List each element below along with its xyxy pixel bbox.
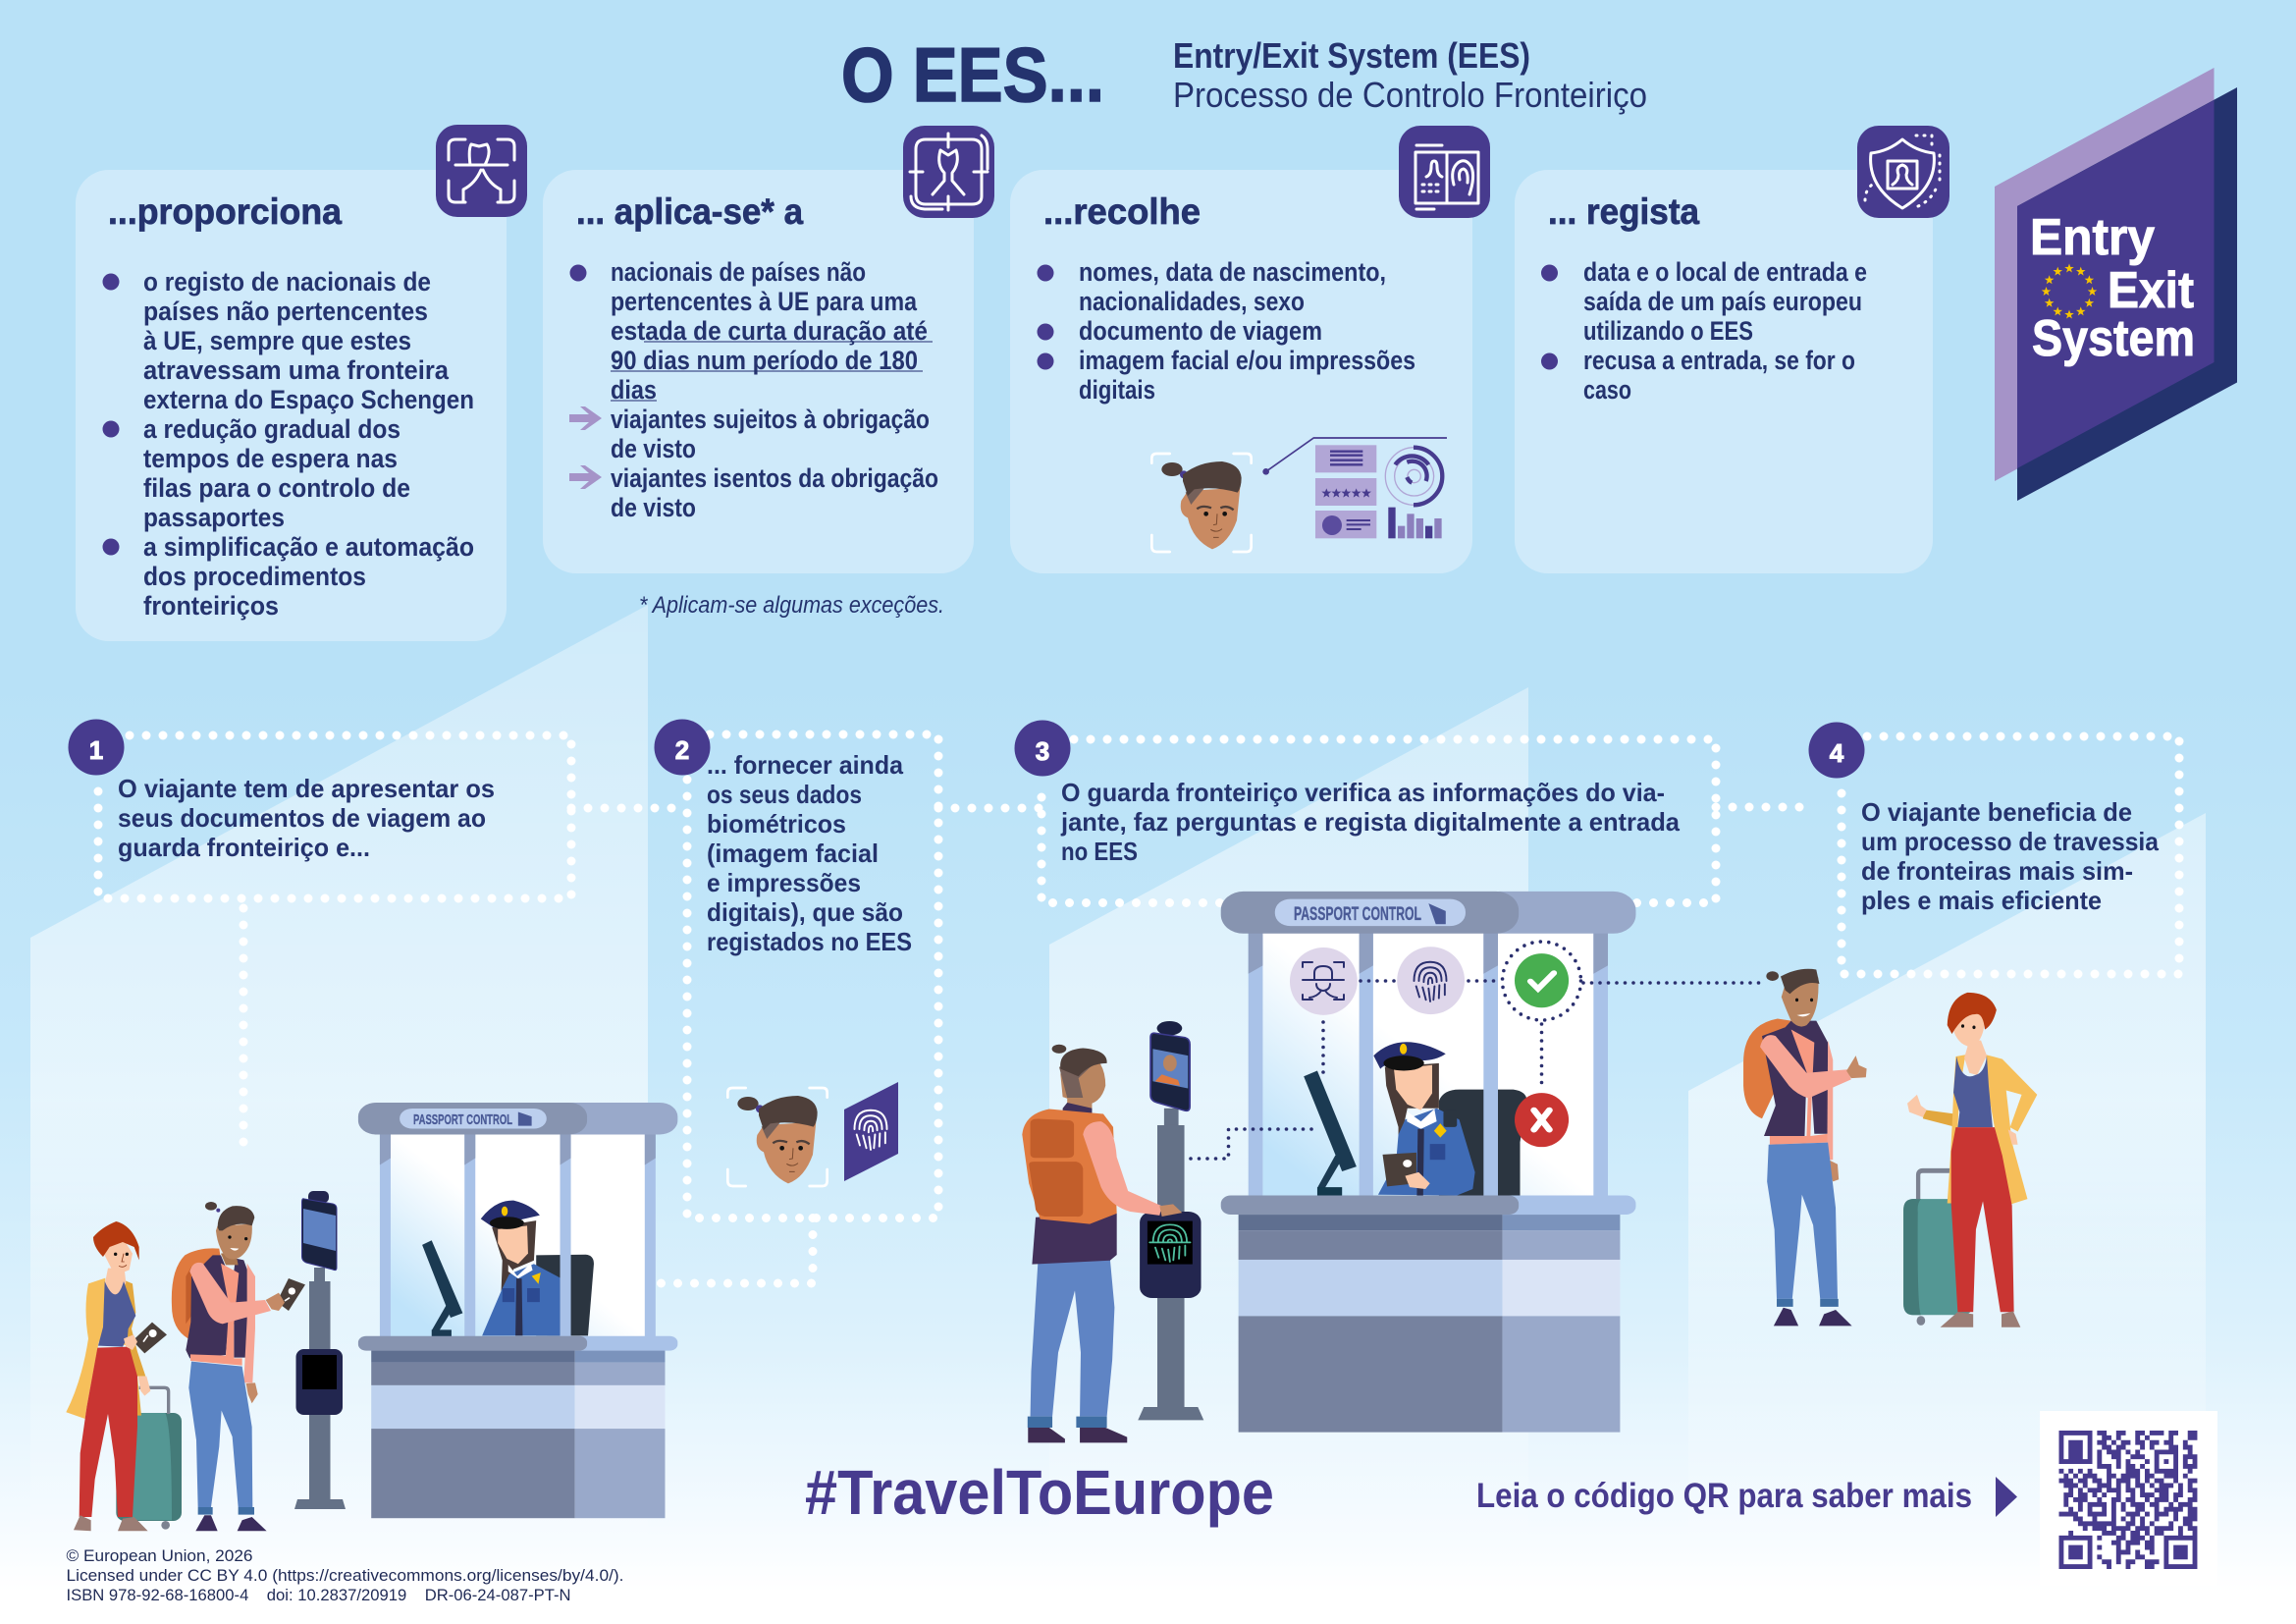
list: caso bbox=[1583, 375, 1631, 405]
list: dias bbox=[611, 375, 657, 405]
traveller: woman bbox=[66, 1221, 182, 1531]
step 1: O viajante tem de apresentar os bbox=[118, 774, 495, 803]
list bbox=[569, 257, 938, 522]
list: países não pertencentes bbox=[143, 297, 428, 326]
list: pertencentes à UE para uma bbox=[611, 287, 917, 316]
icon: face scan bbox=[436, 125, 527, 217]
list: externa do Espaço Schengen bbox=[143, 385, 474, 414]
icon: EU stars bbox=[2042, 263, 2097, 318]
list: digitais bbox=[1079, 375, 1155, 405]
list: a redução gradual dos bbox=[143, 414, 400, 444]
step 4: de fronteiras mais sim- bbox=[1861, 856, 2133, 886]
icon: fingerprint bbox=[1397, 947, 1465, 1014]
arrow: isentos bbox=[569, 465, 602, 489]
step 3: O guarda fronteiriço verifica as informações do via- bbox=[1061, 778, 1665, 807]
list: dos procedimentos bbox=[143, 562, 366, 591]
list bbox=[1037, 257, 1415, 405]
list: o registo de nacionais de bbox=[143, 267, 431, 297]
list: filas para o controlo de bbox=[143, 473, 410, 503]
travellers 1 bbox=[66, 1202, 305, 1531]
booth 1: passport control bbox=[358, 1103, 677, 1518]
call to action: Leia o código QR para saber mais bbox=[1476, 1477, 1972, 1515]
dotted frames and connectors bbox=[98, 734, 2179, 1283]
booth 3: passport control: PASSPORT CONTROL bbox=[1294, 904, 1421, 925]
QR code bbox=[2040, 1411, 2217, 1586]
subtitle: Entry/Exit System (EES) bbox=[1173, 35, 1530, 76]
booth 1: passport control: PASSPORT CONTROL bbox=[413, 1112, 512, 1128]
list: fronteiriços bbox=[143, 591, 279, 621]
step 1 bbox=[69, 719, 495, 862]
list: 90 dias num período de 180 bbox=[611, 346, 918, 375]
step 1: 1 bbox=[89, 735, 103, 765]
arrow bbox=[1996, 1477, 2017, 1517]
list bbox=[1541, 257, 1867, 405]
logo: Entry Exit System: Entry bbox=[2030, 209, 2155, 266]
list: recusa a entrada, se for o bbox=[1583, 346, 1855, 375]
list: utilizando o EES bbox=[1583, 316, 1753, 346]
title: O EES... bbox=[841, 31, 1104, 118]
list: data e o local de entrada e bbox=[1583, 257, 1867, 287]
logo: Entry Exit System bbox=[1995, 68, 2237, 501]
copyright footer bbox=[67, 1546, 624, 1604]
list: viajantes sujeitos à obrigação bbox=[611, 405, 930, 434]
list: viajantes isentos da obrigação bbox=[611, 463, 938, 493]
hashtag: #TravelToEurope bbox=[805, 1457, 1274, 1528]
step 2: registados no EES bbox=[707, 927, 912, 956]
arrow: sujeitos bbox=[569, 406, 602, 430]
step 1: seus documentos de viagem ao bbox=[118, 803, 486, 833]
copyright footer: Licensed under CC BY 4.0 (https://creativecommons.org/licenses/by/4.0/). bbox=[67, 1566, 624, 1585]
icon: target face bbox=[903, 126, 994, 218]
heading: ... aplica-se* a bbox=[576, 191, 803, 232]
list: saída de um país europeu bbox=[1583, 287, 1862, 316]
step 4: um processo de travessia bbox=[1861, 827, 2159, 856]
panel: aplica-se bbox=[543, 126, 994, 573]
step 2: os seus dados bbox=[707, 780, 862, 809]
list: de visto bbox=[611, 434, 696, 463]
step 3: jante, faz perguntas e regista digitalmente a entrada bbox=[1060, 807, 1681, 837]
step 2: 2 bbox=[675, 735, 689, 765]
icon: face with data charts bbox=[1151, 438, 1447, 552]
icon: monitor bbox=[422, 1240, 462, 1336]
logo: Entry Exit System: Exit bbox=[2108, 262, 2194, 319]
list: tempos de espera nas bbox=[143, 444, 398, 473]
step 3 bbox=[1015, 721, 1681, 866]
step 2: ... fornecer ainda bbox=[707, 750, 904, 780]
icon: shield bbox=[1857, 126, 1949, 218]
list: atravessam uma fronteira bbox=[143, 355, 449, 385]
step 2 bbox=[654, 719, 912, 956]
list: nacionalidades, sexo bbox=[1079, 287, 1305, 316]
traveller: woman bbox=[1903, 993, 2037, 1327]
icon: cross bbox=[1515, 1093, 1569, 1147]
list: imagem facial e/ou impressões bbox=[1079, 346, 1415, 375]
booth 3: passport control bbox=[1191, 892, 1764, 1433]
list bbox=[102, 267, 474, 621]
traveller 3: man with backpack bbox=[1022, 1045, 1182, 1442]
heading: ...recolhe bbox=[1043, 191, 1201, 232]
kiosk 1 bbox=[294, 1191, 346, 1509]
step 2: biométricos bbox=[707, 809, 846, 839]
list: nacionais de países não bbox=[611, 257, 866, 287]
panel: proporciona bbox=[76, 125, 527, 641]
heading: ... regista bbox=[1548, 191, 1699, 232]
officer bbox=[1373, 1042, 1526, 1196]
traveller: man bbox=[1743, 969, 1867, 1326]
copyright footer: © European Union, 2026 bbox=[67, 1546, 253, 1565]
travellers 4 bbox=[1743, 969, 2037, 1327]
footnote: * Aplicam-se algumas exceções. bbox=[639, 592, 944, 619]
step 4: O viajante beneficia de bbox=[1861, 797, 2132, 827]
icon: check bbox=[1515, 953, 1569, 1007]
step 2: digitais), que são bbox=[707, 897, 903, 927]
step 3: no EES bbox=[1061, 837, 1138, 866]
copyright footer: ISBN 978-92-68-16800-4 doi: 10.2837/20919 DR-06-24-087-PT-N bbox=[67, 1586, 571, 1604]
panel: recolhe bbox=[1010, 126, 1490, 573]
icon: monitor bbox=[1304, 1070, 1357, 1196]
traveller: man bbox=[172, 1202, 305, 1531]
officer bbox=[481, 1201, 594, 1335]
step 4: 4 bbox=[1830, 738, 1844, 768]
list: passaportes bbox=[143, 503, 285, 532]
list: a simplificação e automação bbox=[143, 532, 474, 562]
icon: face recognition bbox=[1290, 947, 1358, 1015]
step 4: ples e mais eficiente bbox=[1861, 886, 2102, 915]
list: documento de viagem bbox=[1079, 316, 1322, 346]
list: à UE, sempre que estes bbox=[143, 326, 411, 355]
step 2: e impressões bbox=[707, 868, 861, 897]
step 2: (imagem facial bbox=[707, 839, 879, 868]
icon: face scan and fingerprint bbox=[727, 1082, 898, 1186]
panel: regista bbox=[1515, 126, 1949, 573]
step 1: guarda fronteiriço e... bbox=[118, 833, 370, 862]
step 3: 3 bbox=[1036, 736, 1049, 766]
step 4 bbox=[1808, 723, 2159, 915]
list: estada de curta duração até bbox=[611, 316, 928, 346]
logo: Entry Exit System: System bbox=[2032, 310, 2195, 367]
subtitle bbox=[1173, 35, 1647, 115]
kiosk 3 bbox=[1138, 1021, 1203, 1420]
list: nomes, data de nascimento, bbox=[1079, 257, 1386, 287]
list: de visto bbox=[611, 493, 696, 522]
icon: passport biometrics bbox=[1399, 126, 1490, 218]
subtitle: Processo de Controlo Fronteiriço bbox=[1173, 75, 1647, 115]
heading: ...proporciona bbox=[108, 191, 342, 232]
